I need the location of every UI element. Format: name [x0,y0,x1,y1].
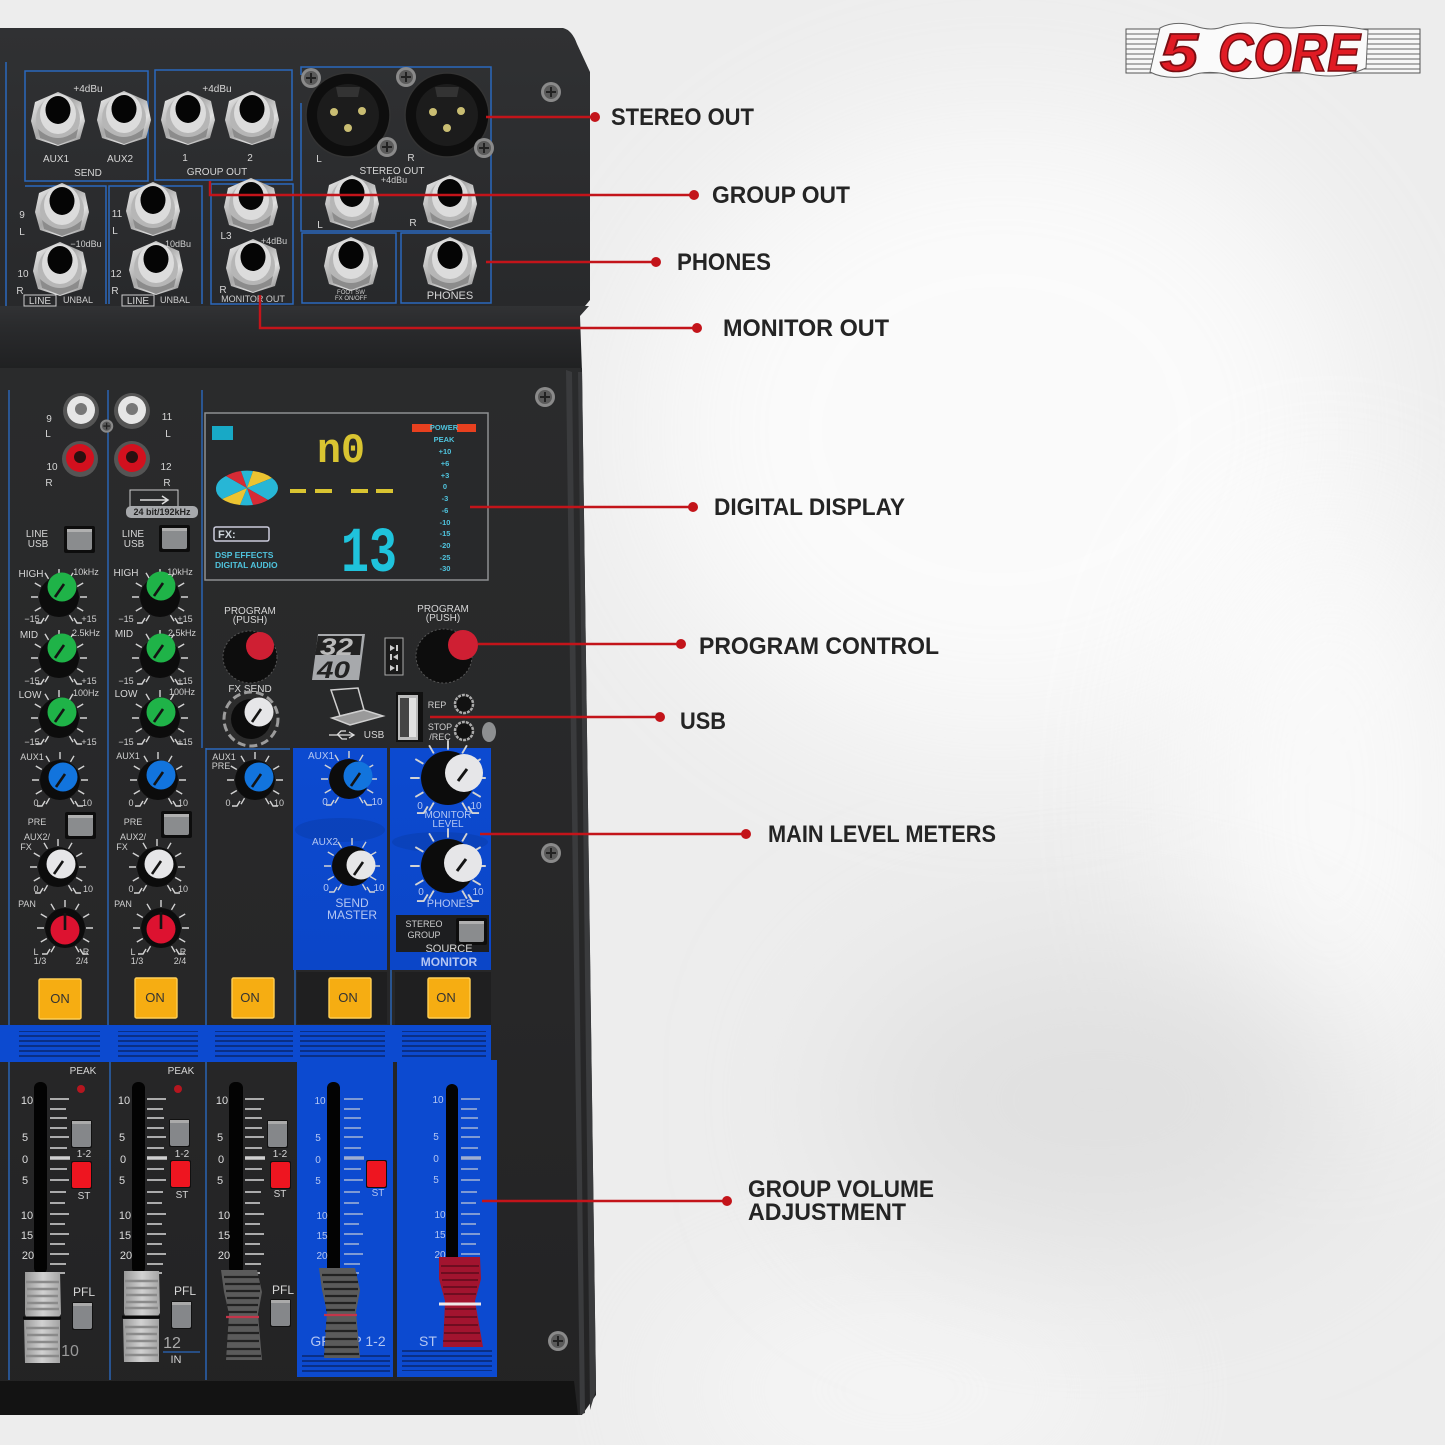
assign buttons [71,1119,387,1330]
monitor source selector: SOURCE [425,943,473,955]
channel knob labels [18,567,284,966]
master knobs [321,740,486,901]
usb port [396,692,423,742]
rear panel labels: PHONES [427,290,473,302]
rear panel labels: 10dBu [165,239,191,249]
preset letters: n0 [317,427,365,475]
channel knob labels: L [130,947,136,957]
fader scale numbers: 10 [218,1210,230,1222]
channel knob labels: FX [20,842,32,852]
fader scale numbers: 10 [314,1096,326,1107]
master section labels: AUX2 [312,837,338,848]
color wheel [216,471,278,505]
callout: main level meters: MAIN LEVEL METERS [768,821,996,848]
fader scale numbers: 15 [316,1231,328,1242]
rear panel labels: R [219,285,227,296]
channel knob labels: HIGH [18,569,44,580]
fader scale numbers [21,1095,446,1262]
XLR stereo out connectors [301,67,494,158]
channel knob labels: LOW [19,690,42,701]
monitor source selector: STEREO [405,919,443,929]
RCA inputs: 12 [160,462,172,473]
rear panel labels: AUX1 [43,154,69,165]
level meter scale: +3 [441,471,449,480]
fader scales [50,1099,481,1273]
fader scale numbers: 10 [434,1210,446,1221]
channel knob labels: HIGH [114,568,138,579]
fader scale numbers: 5 [217,1175,223,1187]
rear panel labels: UNBAL [160,295,190,305]
fader scale numbers: 20 [434,1250,446,1261]
master section labels: PHONES [427,898,473,910]
channel knob labels: 1/3 [34,956,46,966]
rear panel labels: MONITOR OUT [221,294,285,304]
channel knob labels: 100Hz [169,687,196,697]
channel knob labels: R [180,947,187,957]
preset number: 13 [341,519,397,591]
rear panel labels: LINE [127,296,149,307]
fader scale numbers: 15 [434,1230,446,1241]
callout: digital display: DIGITAL DISPLAY [714,494,905,521]
channel knob labels: PRE [212,761,230,771]
rear panel labels: STEREO OUT [359,166,425,177]
ON buttons: ON [240,990,260,1005]
rear panel labels: UNBAL [63,295,93,305]
channel knob labels: 10 [83,884,93,894]
rep and stop buttons: /REC [429,732,451,742]
master section labels: 0 [322,797,328,808]
fader scale numbers: 10 [21,1210,33,1222]
ON buttons: ON [50,991,70,1006]
front face [0,368,596,1415]
channel 9/10 and 11/12 knobs [30,569,283,954]
RCA inputs: 10 [46,462,58,473]
bottom lip [0,1381,578,1415]
rear panel labels: R [16,286,24,297]
channel knob labels: LOW [115,689,138,700]
rear panel labels: LINE [29,296,51,307]
level meter scale: +6 [441,459,449,468]
master section labels: LEVEL [432,819,464,830]
fader strip labels: ST [78,1191,90,1202]
usb label: USB [364,730,385,741]
channel knob labels: AUX1 [116,751,140,761]
rear panel labels: +4dBu [73,84,103,95]
fader strip labels: 1-2 [175,1149,190,1160]
fader strip labels: 1-2 [273,1149,288,1160]
rear panel labels: +4dBu [381,175,407,185]
rear panel labels: −10dBu [70,239,102,249]
monitor source selector: GROUP [407,930,441,940]
rear panel labels: 12 [110,269,122,280]
channel knob labels: 1/3 [131,956,143,966]
level meter scale [430,423,459,573]
USB 24bit badge [126,490,198,518]
master section labels: MASTER [327,908,377,922]
rear panel housing [0,28,590,370]
channel knob labels: PAN [114,899,132,909]
master section labels: SEND [335,896,369,910]
channel knob labels: +15 [177,614,193,624]
rear panel labels: R [111,286,119,297]
fader strip labels: 10 [61,1343,79,1360]
callout: usb: USB [680,708,726,735]
fader scale numbers: 5 [119,1132,125,1144]
callout: monitor out: MONITOR OUT [723,315,889,342]
monitor source selector [396,915,489,969]
channel knob labels: 0 [128,884,134,894]
program knobs: (PUSH) [233,615,267,626]
callout: stereo out: STEREO OUT [611,104,754,131]
line usb switches: LINE [122,529,144,540]
master section labels: 10 [371,797,383,808]
rear panel labels: SEND [74,168,102,179]
channel knob labels: +15 [81,614,97,624]
callout: group volume adjustment [482,1176,934,1226]
rear panel labels: 9 [19,210,25,221]
DSP text: DIGITAL AUDIO [215,560,278,570]
fader scale numbers: 0 [315,1155,321,1166]
channel knob labels: AUX2/ [120,832,147,842]
channel knob labels: 10 [178,798,188,808]
fader scale numbers: 10 [21,1095,33,1107]
rear panel labels: AUX2 [107,154,133,165]
fader scale numbers: 5 [217,1132,223,1144]
level meter scale: -15 [440,529,450,538]
level meter scale: +10 [439,447,451,456]
fader scale numbers: 20 [22,1250,34,1262]
master section labels: 10 [472,887,484,898]
fader strip labels [61,1066,437,1366]
callout: monitor out [260,295,889,342]
rear panel labels: FOOT SW [337,290,365,296]
channel knob labels: AUX2/ [24,832,51,842]
channel knob labels: PAN [18,899,36,909]
channel knob labels: L [33,947,39,957]
channel knob labels: 10 [82,798,92,808]
power bars [412,424,476,432]
usb chip icon [212,426,233,440]
fader scale numbers: 5 [315,1176,321,1187]
pre switches [65,811,192,839]
callout: usb [430,708,726,735]
channel knob labels: 2/4 [76,956,88,966]
callout: phones [486,249,771,276]
fader strip labels: PFL [73,1285,95,1299]
fader scale numbers: 20 [316,1251,328,1262]
program knobs: (PUSH) [426,613,460,624]
fx send knob [224,684,278,746]
callout: main level meters [480,821,996,848]
level meter scale: -25 [440,553,450,562]
fader scale numbers: 10 [216,1095,228,1107]
callout: digital display [470,494,905,521]
channel knob labels: FX [116,842,128,852]
RCA inputs: 11 [162,412,173,423]
channel knob labels: MID [20,630,38,641]
rear panel labels: L [316,154,322,165]
level meter scale: POWER [430,423,459,432]
master section labels: AUX1 [308,751,334,762]
FX box [214,527,269,541]
logo: 5 Core: CORE [1218,23,1362,83]
channel knob labels: 2.5kHz [168,628,197,638]
line usb switches: USB [124,539,145,550]
channel knob labels: −15 [118,676,134,686]
rep and stop buttons: STOP [428,722,452,732]
channel knob labels: 100Hz [73,688,100,698]
channel knob labels: 10 [178,884,188,894]
fader strip labels: ST [419,1333,437,1349]
fader strip labels: IN [170,1354,182,1366]
fader strip labels: ST [176,1190,188,1201]
level meter scale: -10 [440,518,450,527]
level meter scale: -3 [442,494,448,503]
RCA inputs: L [45,429,51,440]
rear panel labels: 11 [112,209,123,220]
RCA inputs: L [165,429,171,440]
fader strip labels: 12 [163,1335,181,1352]
DSP text [215,550,278,570]
callout: group out: GROUP OUT [712,182,850,209]
line usb switches [26,525,190,553]
master section labels: 0 [418,887,424,898]
fader scale numbers: 5 [22,1175,28,1187]
rear panel labels: L [112,226,118,237]
logo: 5 Core: 5 [1160,23,1199,83]
32 bit 40 khz badge [312,634,365,684]
fader scale numbers: 10 [118,1095,130,1107]
rear panel labels: L [317,220,323,231]
callout: group out [210,181,850,209]
fader strip labels: 1-2 [77,1149,92,1160]
fader scale numbers: 15 [21,1230,33,1242]
fader scale numbers: 5 [119,1175,125,1187]
USB 24bit badge: 24 bit/192kHz [133,507,191,517]
line usb switches: USB [28,539,49,550]
logo: 5 Core [1126,23,1420,83]
fader scale numbers: 20 [120,1250,132,1262]
line usb switches: LINE [26,529,48,540]
fader scale numbers: 10 [432,1095,444,1106]
blue stripe band [0,1025,491,1062]
callout: phones: PHONES [677,249,771,276]
program knobs: PROGRAM [224,606,276,617]
channel knob labels: −15 [24,614,40,624]
rear panel labels: L3 [220,231,232,242]
fader slots [34,1082,458,1274]
channel knob labels: PRE [28,817,46,827]
DSP text: DSP EFFECTS [215,550,274,560]
channel knob labels: 10kHz [73,567,99,577]
level meter scale: -30 [440,564,450,573]
usb label [329,730,385,741]
fader scale numbers: 5 [315,1133,321,1144]
fader scale numbers: 0 [218,1154,224,1166]
rear panel labels: L [19,227,25,238]
fader strip labels: ST [372,1188,384,1199]
rear panel labels: +4dBu [202,84,232,95]
master section labels: 10 [373,883,385,894]
fader scale numbers: 20 [218,1250,230,1262]
blue master section [293,748,491,970]
RCA inputs: R [45,478,53,489]
mixer body [0,28,596,1415]
channel knob labels: −15 [24,676,40,686]
channel knob labels: 0 [33,798,39,808]
channel knob labels: 10 [274,798,284,808]
callout: group volume adjustment: ADJUSTMENT [748,1199,906,1226]
fader scale numbers: 0 [433,1154,439,1165]
FX box: FX: [218,529,236,541]
fader scale numbers: 5 [433,1132,439,1143]
monitor source selector: MONITOR [421,955,478,969]
channel knob labels: +15 [81,676,97,686]
channel knob labels: 2.5kHz [72,628,101,638]
fader strip labels: GROUP 1-2 [310,1333,386,1349]
ON buttons [39,972,491,1025]
rep and stop buttons [428,695,496,742]
master section labels: 10 [470,801,482,812]
level meter scale: PEAK [434,435,455,444]
rear panel labels: FX ON/OFF [335,296,367,302]
RCA inputs: 9 [46,414,52,425]
rear panel labels [16,84,473,307]
channel knob labels: MID [115,629,133,640]
fader caps [23,1257,483,1363]
rear panel labels: GROUP OUT [187,167,247,178]
program knobs: PROGRAM [417,604,469,615]
channel knob labels: R [83,947,90,957]
channel knob labels: +15 [177,737,193,747]
laptop icon [331,688,383,725]
channel knob labels: 0 [33,884,39,894]
fader strip labels: PEAK [168,1066,195,1077]
master section labels: 0 [323,883,329,894]
fader scale numbers: 15 [218,1230,230,1242]
channel knob labels: +15 [81,737,97,747]
yellow dashes [290,489,393,493]
fader scale numbers: 0 [120,1154,126,1166]
callout: stereo out [486,104,754,131]
fx send knob: FX SEND [228,684,272,695]
ON buttons: ON [338,990,358,1005]
channel knob labels: 0 [128,798,134,808]
bend lip [0,306,589,372]
channel knob labels: −15 [118,737,134,747]
fader scale numbers: 5 [433,1175,439,1186]
level meter scale: -20 [440,541,450,550]
fader scale numbers: 5 [22,1132,28,1144]
rear panel labels: R [409,218,417,229]
RCA inputs: R [163,478,171,489]
rep and stop buttons: REP [428,700,446,710]
rear panel labels: 10 [17,269,29,280]
rear panel labels: R [407,153,415,164]
fader strip labels: PFL [272,1283,294,1297]
channel knob labels: −15 [24,737,40,747]
blue fader panels [297,1060,497,1377]
32 bit 40 khz badge: 32 [320,634,354,661]
rear panel jacks [31,91,477,296]
panel: rear connector boxes [6,62,491,306]
channel knob labels: AUX1 [212,752,236,762]
fader scale numbers: 10 [316,1211,328,1222]
32 bit 40 khz badge: 40 [316,657,351,684]
program knobs [223,604,478,683]
ON buttons: ON [436,990,456,1005]
fader strip labels: PFL [174,1284,196,1298]
rear panel labels: 1 [182,153,188,164]
master section labels [308,751,484,922]
fader scale numbers: 15 [119,1230,131,1242]
callout: group volume adjustment: GROUP VOLUME [748,1176,934,1203]
fader scale numbers: 0 [22,1154,28,1166]
channel knob labels: −15 [118,614,134,624]
channel knob labels: 0 [225,798,231,808]
channel knob labels: PRE [124,817,142,827]
level meter scale: 0 [443,482,447,491]
channel knob labels: 10kHz [167,567,193,577]
rear panel labels: +4dBu [261,236,287,246]
side edge [566,370,596,1415]
channel knob labels: +15 [177,676,193,686]
rear panel labels: 2 [247,153,253,164]
fader scale numbers: 10 [119,1210,131,1222]
master section labels: 0 [417,801,423,812]
callout: program control: PROGRAM CONTROL [699,633,939,660]
channel divider lines [9,390,391,1380]
chassis screws [535,82,568,1351]
callout: program control [478,633,939,660]
ON buttons: ON [145,990,165,1005]
RCA inputs [45,393,173,489]
level meter scale: -6 [442,506,448,515]
channel knob labels: 2/4 [174,956,186,966]
channel knob labels: AUX1 [20,752,44,762]
digital display screen [205,413,488,591]
master section labels: MONITOR [424,810,472,821]
fader strip labels: ST [274,1189,286,1200]
fader strip labels: PEAK [70,1066,97,1077]
transport symbols [385,638,403,675]
